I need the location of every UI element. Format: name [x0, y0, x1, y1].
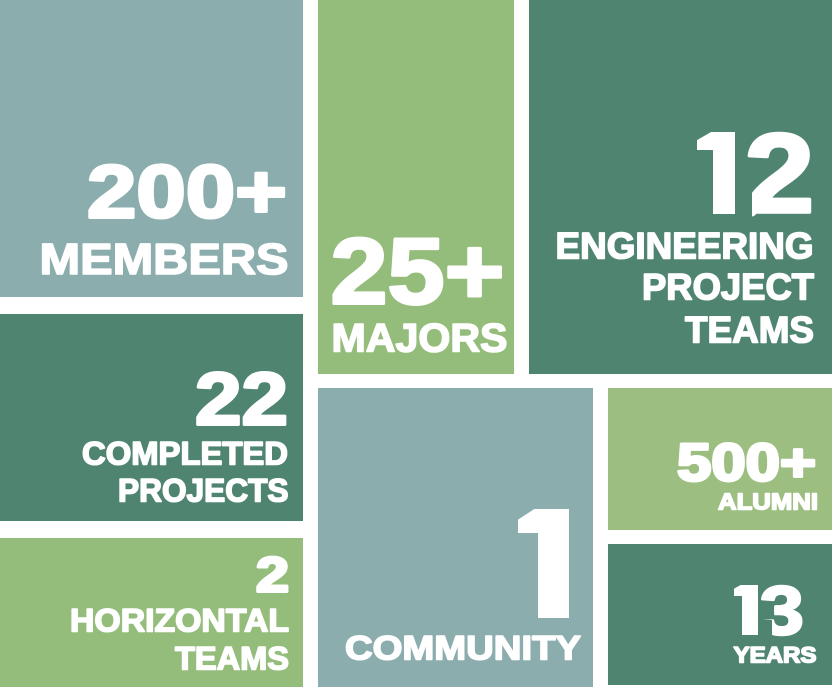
number: 25+: 25+	[330, 218, 504, 324]
number: 2: 2	[256, 548, 289, 602]
label: engineering project teams: ENGINEERING	[556, 226, 814, 266]
panel: horizontal teams	[0, 538, 303, 687]
label: years: YEARS	[734, 642, 816, 668]
label: engineering project teams	[556, 226, 814, 350]
number: 1: 1	[506, 480, 592, 651]
number: 22: 22	[195, 358, 288, 440]
label: completed projects: PROJECTS	[118, 472, 288, 508]
label: horizontal teams: TEAMS	[175, 640, 289, 676]
label: horizontal teams	[70, 602, 289, 676]
number: 13	[734, 584, 802, 636]
number: 13: 3	[760, 572, 804, 649]
number: 12: 2	[744, 111, 814, 236]
panel: completed projects	[0, 314, 303, 521]
label: alumni: ALUMNI	[718, 488, 818, 514]
panel: alumni	[608, 388, 832, 530]
label: majors: MAJORS	[332, 316, 508, 360]
label: community: COMMUNITY	[345, 630, 581, 668]
number: 12: 1	[685, 111, 755, 236]
label: members: MEMBERS	[40, 235, 288, 284]
panel: community	[318, 388, 593, 687]
number: 200+: 200+	[87, 150, 287, 234]
number: 13: 1	[726, 572, 770, 649]
number: 500+: 500+	[677, 434, 816, 492]
label: engineering project teams: PROJECT	[642, 266, 814, 308]
panel: engineering project teams	[529, 0, 832, 374]
label: completed projects	[82, 436, 288, 508]
label: engineering project teams: TEAMS	[685, 310, 814, 350]
number: 12	[697, 132, 812, 216]
label: horizontal teams: HORIZONTAL	[70, 602, 289, 638]
panel: years	[608, 544, 832, 685]
panel: members	[0, 0, 303, 297]
panel: majors	[318, 0, 514, 374]
label: completed projects: COMPLETED	[82, 436, 288, 472]
